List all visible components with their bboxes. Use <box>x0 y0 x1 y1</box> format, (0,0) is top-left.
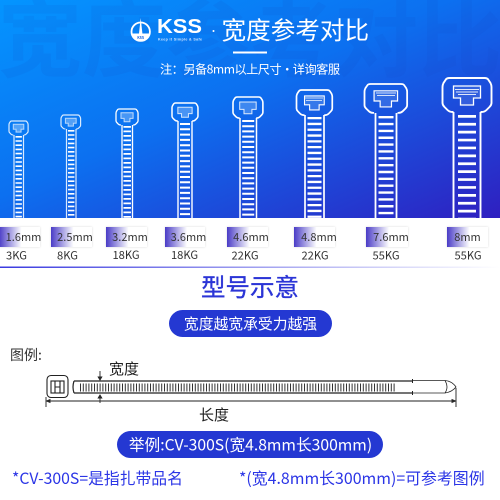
load capacity labels: 22KG <box>231 248 259 264</box>
width labels <box>0 227 488 247</box>
load capacity labels: 18KG <box>112 247 140 263</box>
label 8mm <box>447 227 488 247</box>
load capacity labels: 55KG <box>372 248 400 264</box>
tie head <box>47 376 68 398</box>
tie 8mm <box>442 78 492 218</box>
KSS logo: Keep it Simple & Safe <box>158 38 202 42</box>
label 2.5mm: 2.5mm <box>57 229 93 245</box>
cable tie diagram <box>46 371 456 407</box>
tie 3.2mm <box>116 109 138 218</box>
tie 3.6mm <box>172 103 198 218</box>
load capacity labels: 18KG <box>171 247 198 263</box>
load capacity labels: 22KG <box>301 248 329 264</box>
title underline <box>233 52 267 54</box>
legend label: 图例: <box>10 345 42 365</box>
note: 注：另备8mm以上尺寸·详询客服 <box>160 60 340 78</box>
length label: 长度 <box>199 404 229 425</box>
load capacity labels: 8KG <box>57 248 78 264</box>
label 4.6mm: 4.6mm <box>233 229 269 245</box>
tie tip <box>412 380 456 393</box>
tie 4.8mm <box>296 90 332 218</box>
label 3.6mm: 3.6mm <box>171 229 206 245</box>
pill: example: 举例:CV-300S(宽4.8mm长300mm) <box>129 432 372 456</box>
title separator dot <box>212 30 214 32</box>
tie strap <box>73 381 412 393</box>
KSS logo <box>132 15 202 42</box>
label 4.8mm <box>294 227 337 247</box>
label 3.2mm <box>106 227 148 247</box>
tie 2.5mm <box>61 115 81 218</box>
label 3.2mm: 3.2mm <box>112 229 148 245</box>
label 2.5mm <box>51 227 93 247</box>
width arrows <box>98 371 102 403</box>
pill: wider is stronger: 宽度越宽承受力越强 <box>184 313 317 334</box>
label 3.6mm <box>165 227 206 247</box>
KSS logo: KSS <box>157 15 202 38</box>
tie 1.6mm <box>9 121 28 218</box>
KSS logo: KSS <box>137 36 145 41</box>
label 1.6mm <box>0 227 41 247</box>
tie 7.6mm <box>364 84 407 218</box>
label 4.6mm <box>227 227 269 247</box>
label 1.6mm: 1.6mm <box>6 229 41 245</box>
load capacity labels: 3KG <box>6 248 27 264</box>
title: 宽度参考对比 <box>222 11 369 47</box>
footnote right: *(宽4.8mm长300mm)=可参考图例 <box>239 466 485 489</box>
load capacity labels <box>6 247 482 264</box>
width label: 宽度 <box>109 358 139 379</box>
tie 4.6mm <box>233 97 263 218</box>
footnote left: *CV-300S=是指扎带品名 <box>12 466 183 489</box>
label 7.6mm <box>366 227 409 247</box>
label 4.8mm: 4.8mm <box>301 229 337 245</box>
label 7.6mm: 7.6mm <box>373 229 409 245</box>
load capacity labels: 55KG <box>454 248 482 264</box>
length arrow <box>46 388 456 407</box>
divider <box>0 266 500 268</box>
label 8mm: 8mm <box>454 229 481 245</box>
section heading: 型号示意 <box>201 269 299 304</box>
pill: wider is stronger <box>169 310 332 337</box>
